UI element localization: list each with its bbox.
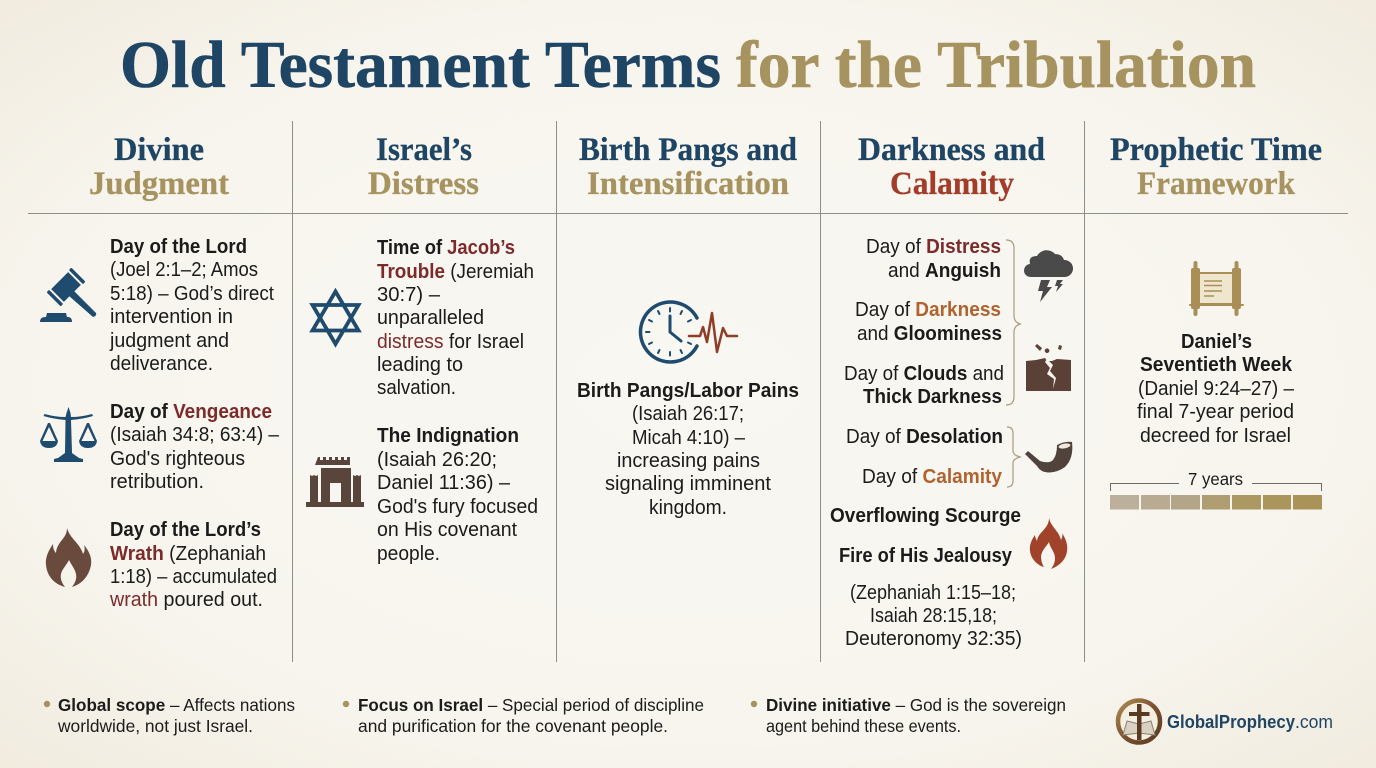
text: The Indignation: God's fury focused: [377, 496, 538, 518]
text: Day of the Lord: Day of the Lord: [110, 236, 247, 258]
icon: scales: [40, 407, 97, 462]
icon: gavel: [40, 268, 96, 322]
bullet: Global scope: worldwide, not just Israel.: [57, 716, 253, 736]
bullet: Global scope: Global scope – Affects nations: [58, 695, 295, 715]
heading: Birth Pangs and Intensification: Intensification: [587, 166, 789, 202]
timeline: 7 years: [1110, 469, 1322, 510]
text: Darkness references: [845, 582, 1022, 650]
text: Day of the Lord's Wrath: [109, 519, 277, 611]
text: Time of Jacob's Trouble: unparalleled: [377, 307, 484, 329]
title: for the Tribulation: [736, 28, 1256, 102]
title: [120, 28, 1256, 102]
icon: flame: [46, 528, 91, 587]
text: Time of Jacob's Trouble: distress for Israel: [377, 331, 524, 353]
text: Darkness terms group two: Day of Desolation: [846, 426, 1003, 448]
text: Darkness references: (Zephaniah 1:15–18;: [850, 582, 1016, 604]
bullet: Divine initiative: agent behind these events.: [766, 716, 961, 736]
heading: Darkness and Calamity: Darkness and: [858, 132, 1045, 168]
text: Day of the Lord's Wrath: 1:18) – accumulated: [110, 566, 277, 588]
text: Birth Pangs / Labor Pains: Micah 4:10) –: [632, 427, 746, 449]
text: Day of Vengeance: (Isaiah 34:8; 63:4) –: [110, 424, 280, 446]
bullet: Divine initiative: Divine initiative – God is the sovereign: [766, 695, 1066, 715]
heading: Birth Pangs and Intensification: Birth Pangs and: [579, 132, 797, 168]
text: Daniel's Seventieth Week: (Daniel 9:24–27) –: [1138, 378, 1295, 400]
heading: Darkness and Calamity: [858, 132, 1045, 202]
timeline: 7 years: 7 years: [1188, 469, 1243, 489]
text: Day of Vengeance: [110, 401, 280, 493]
text: Overflowing Scourge and Fire: Fire of His Jealousy: [839, 545, 1013, 567]
heading: Divine Judgment: [89, 132, 229, 202]
text: Time of Jacob's Trouble: Trouble (Jeremiah: [377, 261, 534, 283]
heading: Israel's Distress: Distress: [368, 166, 479, 202]
text: Overflowing Scourge and Fire: Overflowing Scourge: [830, 505, 1021, 527]
text: Birth Pangs / Labor Pains: (Isaiah 26:17;: [632, 403, 744, 425]
icon: cracked ground: [1026, 344, 1071, 391]
icon: clock with pulse: [640, 302, 737, 362]
text: The Indignation: The Indignation: [377, 425, 519, 447]
text: Darkness terms group one: [844, 236, 1004, 408]
logo: GlobalProphecy.com: .com: [1295, 711, 1333, 732]
text: Darkness terms group one: and Gloominess: [857, 323, 1002, 345]
icon: temple: [306, 457, 364, 507]
text: Day of the Lord's Wrath: wrath poured out.: [109, 589, 263, 611]
brace: group one: [1006, 240, 1020, 405]
text: Daniel's Seventieth Week: final 7-year period: [1137, 401, 1294, 423]
heading: Prophetic Time Framework: [1110, 132, 1322, 202]
bullet: Global scope: [44, 695, 295, 736]
brace: group two: [1007, 427, 1020, 487]
text: Darkness terms group one: Day of Distress: [866, 236, 1001, 258]
bullet: Focus on Israel: Focus on Israel – Special period of discipline: [358, 695, 704, 715]
heading: Prophetic Time Framework: Prophetic Time: [1110, 132, 1322, 168]
text: The Indignation: (Isaiah 26:20;: [377, 449, 497, 471]
text: Darkness terms group two: [846, 426, 1003, 488]
text: Time of Jacob's Trouble: leading to: [377, 354, 463, 376]
text: Day of the Lord: deliverance.: [110, 353, 213, 375]
text: Day of Vengeance: God's righteous: [110, 448, 245, 470]
text: Darkness terms group one: Day of Darkness: [855, 299, 1001, 321]
text: Day of the Lord: [109, 236, 274, 375]
text: Day of the Lord: judgment and: [109, 330, 229, 352]
bullet: Focus on Israel: [343, 695, 704, 736]
text: Birth Pangs / Labor Pains: Birth Pangs/Labor Pains: [577, 380, 799, 402]
heading: Divine Judgment: Judgment: [89, 166, 229, 202]
text: Darkness references: Isaiah 28:15,18;: [870, 605, 997, 627]
heading: Prophetic Time Framework: Framework: [1137, 166, 1296, 202]
text: Daniel's Seventieth Week: [1137, 331, 1295, 447]
logo: GlobalProphecy.com: [1118, 700, 1333, 742]
text: Day of Vengeance: Day of Vengeance: [110, 401, 272, 423]
text: Time of Jacob's Trouble: [377, 237, 534, 399]
text: Birth Pangs / Labor Pains: [577, 380, 799, 519]
logo: GlobalProphecy.com: GlobalProphecy: [1167, 711, 1296, 732]
text: Birth Pangs / Labor Pains: kingdom.: [649, 497, 727, 519]
text: Overflowing Scourge and Fire: [830, 505, 1021, 567]
text: Darkness terms group one: Day of Clouds and: [844, 363, 1004, 385]
text: Day of the Lord: 5:18) – God’s direct: [110, 283, 274, 305]
text: The Indignation: [377, 425, 538, 565]
text: Daniel's Seventieth Week: Daniel’s: [1181, 331, 1252, 353]
text: Day of the Lord: intervention in: [110, 306, 233, 328]
bullet: Divine initiative: [751, 695, 1066, 736]
text: Day of Vengeance: retribution.: [110, 471, 204, 493]
text: The Indignation: Daniel 11:36) –: [377, 472, 511, 494]
text: Time of Jacob's Trouble: salvation.: [377, 377, 456, 399]
text: Day of the Lord: (Joel 2:1–2; Amos: [110, 259, 258, 281]
title: Old Testament Terms: [120, 28, 721, 102]
text: Daniel's Seventieth Week: decreed for Israel: [1140, 425, 1291, 447]
text: The Indignation: people.: [377, 543, 440, 565]
icon: shofar horn: [1025, 442, 1072, 472]
icon: scroll: [1190, 263, 1243, 314]
icon: star of David: [312, 292, 358, 344]
text: Darkness references: Deuteronomy 32:35): [845, 628, 1022, 650]
text: Birth Pangs / Labor Pains: increasing pains: [617, 450, 760, 472]
text: Darkness terms group two: Day of Calamity: [862, 466, 1003, 488]
heading: Divine Judgment: Divine: [114, 132, 204, 168]
text: Day of the Lord's Wrath: Wrath (Zephaniah: [110, 543, 266, 565]
text: Day of the Lord's Wrath: Day of the Lord’s: [110, 519, 261, 541]
text: Darkness terms group one: Thick Darkness: [863, 386, 1002, 408]
heading: Israel's Distress: Israel’s: [376, 132, 472, 168]
heading: Darkness and Calamity: Calamity: [890, 166, 1014, 202]
heading: Israel's Distress: [368, 132, 479, 202]
icon: storm cloud: [1024, 250, 1073, 302]
text: Time of Jacob's Trouble: Time of Jacob’s: [377, 237, 515, 259]
text: Birth Pangs / Labor Pains: signaling imminent: [605, 473, 771, 495]
text: The Indignation: on His covenant: [377, 519, 517, 541]
text: Daniel's Seventieth Week: Seventieth Week: [1140, 354, 1293, 376]
text: Time of Jacob's Trouble: 30:7) –: [377, 284, 441, 306]
icon: fire: [1030, 518, 1067, 569]
heading: Birth Pangs and Intensification: [579, 132, 797, 202]
bullet: Focus on Israel: and purification for the covenant people.: [358, 716, 668, 736]
text: Darkness terms group one: and Anguish: [888, 260, 1001, 282]
